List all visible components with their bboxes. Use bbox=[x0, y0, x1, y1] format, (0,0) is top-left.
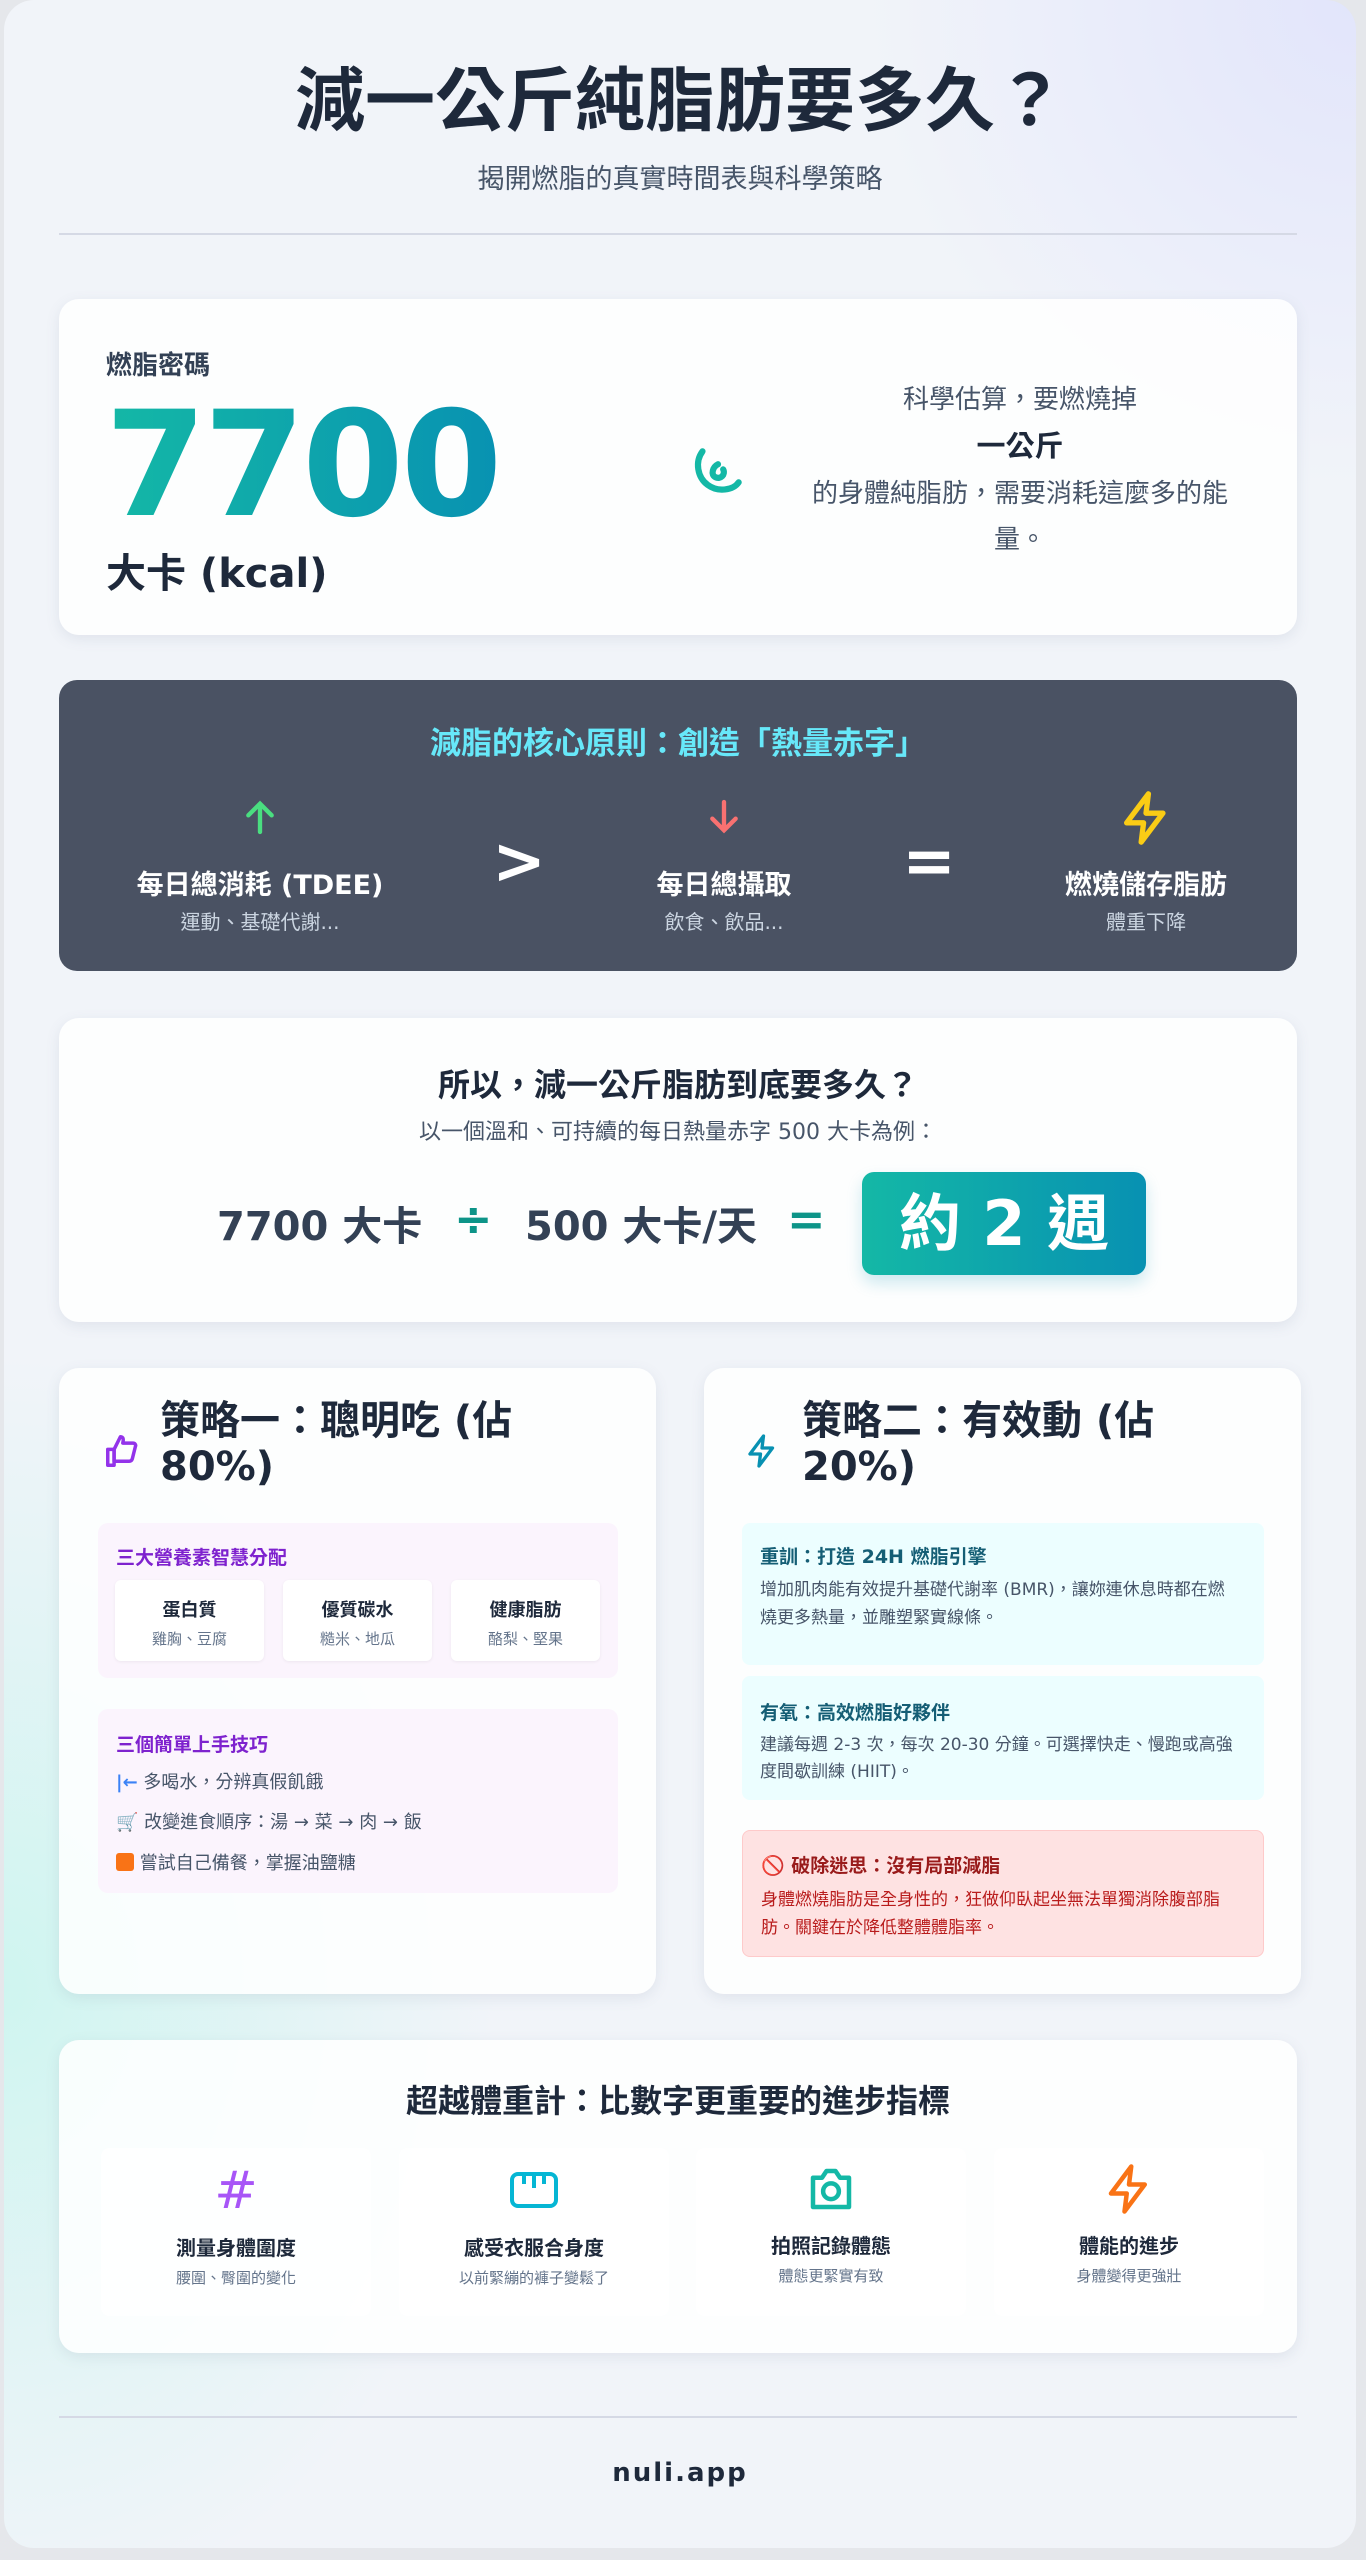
equation: ÷ bbox=[454, 1192, 493, 1246]
operator =: = bbox=[902, 825, 956, 899]
explanation text: 科學估算，要燃燒掉 bbox=[903, 385, 1137, 415]
column: result: 體重下降 bbox=[1106, 910, 1186, 934]
macro: carbs: 糙米、地瓜 bbox=[320, 1630, 395, 1648]
column: result: 燃燒儲存脂肪 bbox=[1065, 870, 1227, 901]
column: intake: 飲食、飲品... bbox=[664, 910, 784, 934]
icon: thumbs up bbox=[106, 1435, 138, 1467]
indicator: clothes: 感受衣服合身度 bbox=[464, 2236, 604, 2260]
heading: 所以，減一公斤脂肪到底要多久？ bbox=[438, 1066, 918, 1104]
panel: fat-burn code bbox=[59, 299, 1297, 635]
panel: progress indicators bbox=[59, 2040, 1297, 2353]
unit: 大卡 (kcal) bbox=[106, 551, 328, 597]
label: 燃脂密碼: 燃脂密碼 bbox=[106, 351, 210, 381]
callout: myth: 身體燃燒脂肪是全身性的，狂做仰臥起坐無法單獨消除腹部脂肪。關鍵在於降低整體體脂率。 bbox=[761, 1890, 1220, 1938]
equation bbox=[217, 1172, 1154, 1290]
icon: lightning bbox=[748, 1434, 774, 1468]
tip 1: |← 多喝水，分辨真假飢餓 bbox=[116, 1772, 323, 1793]
macro: carbs bbox=[283, 1580, 432, 1661]
explanation text: 的身體純脂肪，需要消耗這麼多的能量。 bbox=[812, 479, 1228, 555]
indicator: fitness bbox=[994, 2148, 1264, 2316]
heading: 減脂的核心原則：創造「熱量赤字」 bbox=[430, 726, 926, 762]
big number 7700: 7700 bbox=[105, 380, 499, 550]
subheading: 以一個溫和、可持續的每日熱量赤字 500 大卡為例： bbox=[419, 1120, 937, 1145]
indicator: measure: 腰圍、臀圍的變化 bbox=[176, 2269, 296, 2287]
indicator: measure bbox=[101, 2148, 371, 2316]
result badge: 約 2 週 bbox=[899, 1187, 1109, 1260]
box: strength: 增加肌肉能有效提升基礎代謝率 (BMR)，讓妳連休息時都在燃燒更多熱量，並雕塑緊實線條。 bbox=[760, 1580, 1225, 1628]
panel: calorie deficit principle bbox=[59, 680, 1297, 971]
sub-panel: tips: 三個簡單上手技巧 bbox=[116, 1734, 268, 1756]
macro: fats: 健康脂肪 bbox=[490, 1600, 562, 1621]
macro: fats bbox=[451, 1580, 600, 1661]
callout: myth bbox=[742, 1830, 1264, 1957]
column: intake: 每日總攝取 bbox=[656, 870, 792, 901]
icon: flame bbox=[694, 448, 742, 493]
column: intake bbox=[656, 800, 792, 934]
box: strength bbox=[742, 1523, 1264, 1665]
subtitle: 揭開燃脂的真實時間表與科學策略 bbox=[478, 164, 882, 195]
equation: = bbox=[787, 1192, 826, 1246]
sub-panel: macronutrients: 三大營養素智慧分配 bbox=[116, 1547, 287, 1569]
sub-panel: tips bbox=[98, 1709, 618, 1893]
callout: myth: 🚫 破除迷思：沒有局部減脂 bbox=[761, 1855, 1000, 1877]
indicator: measure: # bbox=[214, 2161, 258, 2221]
tip 2: 🛒 改變進食順序：湯 → 菜 → 肉 → 飯 bbox=[116, 1812, 422, 1833]
footer brand: nuli.app bbox=[612, 2458, 748, 2488]
heading: 策略二：有效動 (佔 20%) bbox=[802, 1398, 1154, 1490]
indicator: photo: 拍照記錄體態 bbox=[771, 2234, 891, 2258]
panel: how long calculation bbox=[59, 1018, 1297, 1322]
result badge bbox=[862, 1172, 1146, 1275]
tip 3: 嘗試自己備餐，掌握油鹽糖 bbox=[140, 1853, 356, 1874]
box: cardio bbox=[742, 1676, 1264, 1800]
indicator: photo: 體態更緊實有致 bbox=[778, 2267, 884, 2285]
icon: down arrow bbox=[710, 800, 738, 834]
operator >: > bbox=[492, 825, 546, 899]
sub-panel: macronutrients bbox=[98, 1523, 618, 1678]
macro: protein bbox=[115, 1580, 264, 1661]
macro: protein: 雞胸、豆腐 bbox=[152, 1630, 227, 1648]
indicator: fitness: 體能的進步 bbox=[1079, 2234, 1179, 2258]
indicator: clothes bbox=[399, 2148, 669, 2316]
column: TDEE: 每日總消耗 (TDEE) bbox=[137, 870, 383, 901]
box: cardio: 建議每週 2-3 次，每次 20-30 分鐘。可選擇快走、慢跑或高強度間歇訓練 (HIIT)。 bbox=[760, 1735, 1233, 1782]
panel: strategy 1 eat smart bbox=[59, 1368, 656, 1994]
indicator: fitness: 身體變得更強壯 bbox=[1076, 2267, 1182, 2285]
column: result bbox=[1065, 791, 1227, 934]
macro: fats: 酪梨、堅果 bbox=[488, 1630, 563, 1648]
indicator: measure: 測量身體圍度 bbox=[176, 2236, 296, 2260]
title: 減一公斤純脂肪要多久？ bbox=[295, 60, 1065, 142]
box: cardio: 有氧：高效燃脂好夥伴 bbox=[760, 1702, 950, 1724]
explanation text bbox=[812, 385, 1228, 555]
equation: 7700 大卡 bbox=[217, 1204, 422, 1250]
panel: strategy 2 exercise bbox=[704, 1368, 1301, 1994]
column: TDEE: 運動、基礎代謝... bbox=[180, 910, 340, 934]
heading: 超越體重計：比數字更重要的進步指標 bbox=[406, 2082, 950, 2120]
explanation text: 一公斤 bbox=[976, 429, 1064, 463]
icon: up arrow bbox=[246, 800, 274, 834]
column: TDEE bbox=[137, 800, 383, 934]
equation: 500 大卡/天 bbox=[525, 1204, 757, 1250]
indicator: photo bbox=[696, 2148, 966, 2316]
icon: lightning bbox=[1124, 791, 1166, 845]
box: strength: 重訓：打造 24H 燃脂引擎 bbox=[760, 1546, 987, 1568]
heading: 策略一：聰明吃 (佔 80%) bbox=[160, 1398, 512, 1490]
indicator: clothes: 以前緊繃的褲子變鬆了 bbox=[459, 2269, 609, 2287]
macro: carbs: 優質碳水 bbox=[322, 1600, 394, 1621]
macro: protein: 蛋白質 bbox=[162, 1600, 216, 1621]
